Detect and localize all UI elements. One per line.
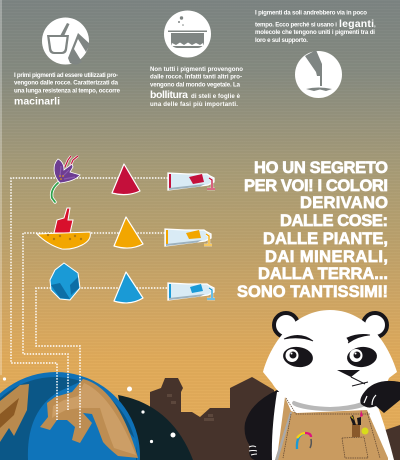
heading: DALLE PIANTE,: [263, 230, 388, 248]
text block: leganti: molecole che tengono uniti i pigmenti tra di: [255, 29, 375, 36]
text block: bollitura: una delle fasi più importanti.: [150, 101, 238, 108]
text block: macinarli: I primi pigmenti ad essere utilizzati pro-: [14, 72, 118, 79]
text block: bollitura: vengono dal mondo vegetale. La: [150, 82, 241, 88]
dotted connector lines: [1, 0, 168, 428]
text block: macinarli: macinarli: [14, 96, 60, 108]
globe: [0, 372, 140, 460]
heading: DALLA TERRA...: [258, 265, 388, 283]
icon: mortar and pestle: [42, 18, 90, 65]
panda: [245, 310, 400, 460]
row 3: blue paint tube: [168, 283, 215, 300]
panda: nose and mouth: [337, 370, 368, 386]
text block: macinarli: vengono dalle rocce. Caratterizzati da: [14, 80, 119, 86]
castle silhouette: [150, 377, 274, 460]
stars: [3, 377, 176, 443]
row 3: blue pigment cone: [114, 272, 143, 303]
heading: PER VOI! I COLORI: [244, 177, 388, 195]
text block: bollitura: di steli e foglie è: [191, 93, 241, 100]
dark planet: [118, 395, 193, 460]
text block: leganti: [255, 10, 376, 44]
panda: apron: [275, 397, 388, 460]
text block: bollitura: Non tutti i pigmenti provengono: [150, 66, 243, 73]
panda: left paw claws: [249, 446, 257, 455]
text block: bollitura: [150, 66, 243, 108]
panda: right paw: [360, 381, 400, 413]
row 1: saffron flower: [52, 156, 80, 202]
text block: leganti: tempo. Ecco perché si usano i: [255, 22, 337, 28]
text block: bollitura: bollitura: [150, 89, 188, 101]
heading: SONO TANTISSIMI!: [237, 283, 388, 301]
row 1: red pigment cone: [112, 164, 140, 195]
heading: HO UN SEGRETO: [254, 159, 388, 177]
text block: leganti: I pigmenti da soli andrebbero via in poco: [255, 10, 367, 16]
text block: leganti: ,: [374, 22, 376, 28]
heading: DERIVANO: [300, 194, 388, 212]
panda: left eye: [282, 345, 314, 369]
row 2: orange earth with red shovel: [37, 208, 90, 249]
row 3: blue mineral rock: [50, 263, 80, 300]
castle behind right: [385, 425, 400, 460]
heading: DAI MINERALI,: [265, 248, 388, 266]
row 2: orange paint tube: [165, 229, 212, 246]
panda: body: [272, 392, 394, 460]
text block: macinarli: una lunga resistenza al tempo, occorre: [14, 88, 121, 94]
panda: eyebrows: [284, 334, 370, 343]
text block: leganti: leganti: [339, 18, 374, 30]
row 1: red paint tube: [168, 173, 215, 190]
text block: leganti: loro e sul supporto.: [255, 37, 308, 44]
row 2: orange pigment cone: [114, 217, 143, 248]
heading: DALLE COSE:: [280, 212, 388, 230]
heading: [237, 159, 388, 301]
text block: macinarli: [14, 72, 121, 108]
panda: right eye: [346, 345, 378, 369]
panda: head: [263, 310, 397, 407]
icon: pouring binder: [295, 50, 342, 98]
icon: boiling pot: [164, 10, 211, 58]
panda: neck shadow: [292, 395, 368, 411]
text block: bollitura: dalle rocce. Infatti tanti altri pro-: [150, 74, 242, 80]
panda: ears: [274, 313, 387, 337]
panda: left arm: [245, 390, 282, 460]
panda: brushes and paint: [297, 410, 368, 449]
